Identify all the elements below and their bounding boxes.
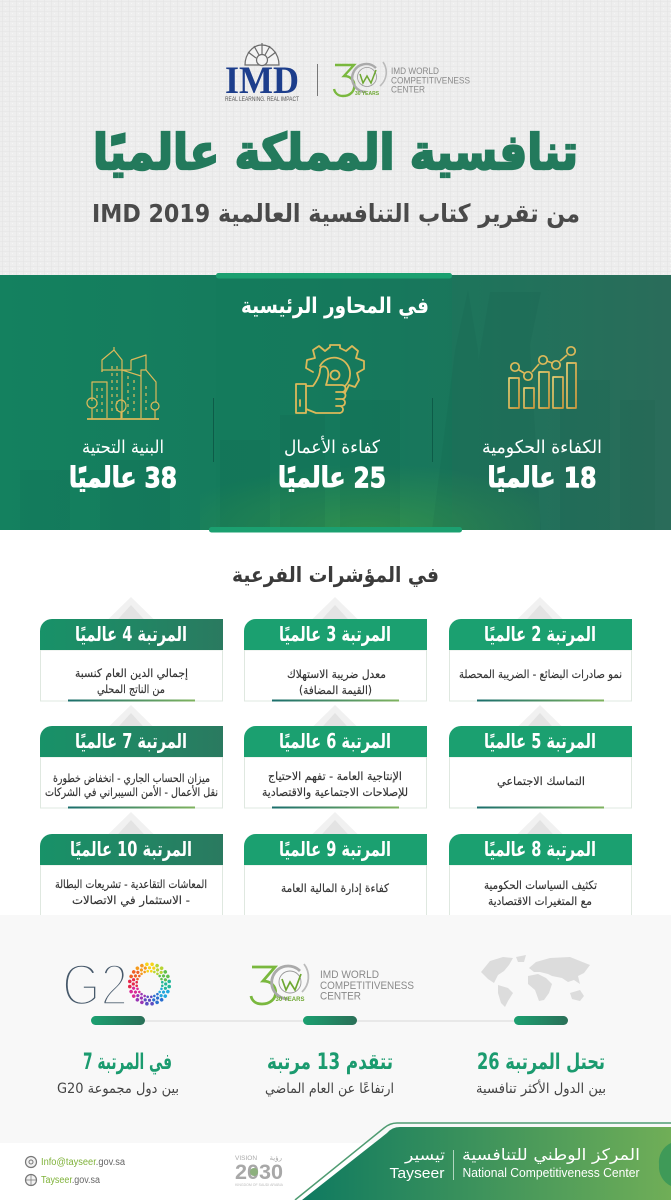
panel: Tayseer banner [295,1123,671,1200]
card: rank 3: معدل ضريبة الاستهلاك [287,667,386,682]
IMD logo: REAL LEARNING. REAL IMPACT [225,97,299,103]
pillar: business efficiency [278,436,386,494]
card: rank 2: نمو صادرات البضائع - الضريبة المحصلة [459,667,622,682]
IMD world competitiveness center logo: IMD WORLD [391,66,439,77]
card: rank 4 [40,619,223,702]
card: rank 8: تكثيف السياسات الحكومية [484,878,597,893]
card: rank 2: المرتبة 2 عالميًا [484,622,596,646]
contact: website: Tayseer.gov.sa [41,1175,100,1186]
Latin brand name: Tayseer [390,1165,444,1182]
logo: IMD world competitiveness center: CENTER [320,990,361,1002]
card: rank 10: المرتبة 10 عالميًا [70,837,192,861]
title: تنافسية المملكة عالميًا [93,124,578,181]
stat: rank 26: بين الدول الأكثر تنافسية [476,1079,606,1097]
marker: climb [303,1016,357,1025]
card: rank 5: المرتبة 5 عالميًا [484,729,596,753]
icon: 30 years emblem: 30 YEARS [355,91,380,97]
card: rank 3: (القيمة المضافة) [299,683,372,697]
top accent bar [216,273,452,278]
card: rank 9 [244,834,427,916]
card: rank 7: ميزان الحساب الجاري - انخفاض خطورة [53,771,210,786]
pillar: business efficiency: 25 عالميًا [278,461,386,494]
logo: vision 2030: 2030 [235,1161,283,1184]
card: rank 5: التماسك الاجتماعي [497,774,585,788]
icon: G20 colour ring [128,962,171,1006]
IMD logo [225,43,299,103]
stat: up 13 places [265,1050,394,1097]
card: rank 4: من الناتج المحلي [97,682,165,697]
logo: IMD world competitiveness center: IMD WORLD [320,969,379,981]
pillar: infrastructure: 38 عالميًا [69,461,177,494]
card: rank 10: المعاشات التقاعدية - تشريعات البطالة [55,877,207,892]
card: rank 8: المرتبة 8 عالميًا [484,837,596,861]
card: rank 8 [449,834,632,916]
pillar: infrastructure [69,437,177,494]
logo: vision 2030: VISION [235,1155,257,1162]
panel: global ranks [0,915,671,1143]
card: rank 10: - الاستثمار في الاتصالات [72,893,190,908]
stat: up 13 places: تتقدم 13 مرتبة [267,1050,393,1075]
logo: IMD world competitiveness center [251,964,414,1004]
card: rank 9: المرتبة 9 عالميًا [279,837,391,861]
stat: G20 rank 7: بين دول مجموعة G20 [57,1081,179,1097]
card: rank 3: المرتبة 3 عالميًا [279,622,391,646]
logo: G20: G2 [62,953,128,1018]
logo: IMD world competitiveness center: 30 YEARS [276,997,304,1003]
card: rank 4: إجمالي الدين العام كنسبة [75,666,188,681]
logo: vision 2030 [235,1154,284,1187]
subtitle: من تقرير كتاب التنافسية العالمية IMD 2019 [92,199,580,229]
heading: main pillars: في المحاور الرئيسية [241,294,429,319]
card: rank 6 [244,726,427,808]
card: rank 8: مع المتغيرات الاقتصادية [488,894,592,909]
pillar: government efficiency: 18 عالميًا [487,461,596,494]
stat: up 13 places: ارتفاعًا عن العام الماضي [265,1081,394,1097]
pillar: business efficiency: كفاءة الأعمال [284,436,380,458]
bottom accent bar [209,527,462,532]
card: rank 7: نقل الأعمال - الأمن السيبراني في الشركات [45,785,218,800]
IMD world competitiveness center logo: COMPETITIVENESS [391,76,470,86]
card: rank 6: للإصلاحات الاجتماعية والاقتصادية [262,785,408,800]
icon: gear and thumb [296,345,364,413]
card: rank 6: المرتبة 6 عالميًا [279,729,391,753]
card: rank 7 [40,726,223,808]
panel: main pillars [0,273,671,532]
icon: world map [481,955,590,1007]
marker: G20 [91,1016,145,1025]
Arabic brand name: تيسير [404,1146,445,1164]
stat: rank 26: تحتل المرتبة 26 [477,1050,605,1075]
card: rank 9: كفاءة إدارة المالية العامة [281,881,389,896]
card: rank 3 [244,619,427,702]
pillar: infrastructure: البنية التحتية [82,437,164,458]
card: rank 2 [449,619,632,702]
icon: city [87,347,159,419]
icon: chart [509,347,576,408]
stat: G20 rank 7: في المرتبة 7 [83,1050,172,1075]
IMD logo: IMD [225,59,299,102]
logo: vision 2030: رؤية [270,1154,282,1162]
contact: email: Info@tayseer.gov.sa [41,1157,125,1168]
pillar: government efficiency [482,437,602,494]
Arabic centre name: المركز الوطني للتنافسية [462,1145,640,1165]
card: rank 5 [449,726,632,808]
icon: IMD sunburst arch [245,43,279,66]
card: rank 7: المرتبة 7 عالميًا [75,729,187,753]
heading: sub indicators: في المؤشرات الفرعية [232,563,439,587]
chevrons behind cards [87,597,584,855]
stat: G20 rank 7 [57,1050,179,1097]
footer [0,1123,671,1200]
skyline [20,290,655,530]
IMD world competitiveness center logo: CENTER [391,84,425,96]
logo: vision 2030: KINGDOM OF SAUDI ARABIA [235,1183,284,1187]
card: rank 6: الإنتاجية العامة - تفهم الاحتياج [268,769,402,783]
stat: rank 26 [476,1050,606,1097]
card: rank 4: المرتبة 4 عالميًا [75,622,187,646]
pillar: government efficiency: الكفاءة الحكومية [482,437,602,458]
English centre name: National Competitiveness Center [462,1165,640,1180]
card: rank 10 [40,834,223,916]
header paper background [0,0,671,276]
logo: IMD world competitiveness center: COMPETITIVENESS [320,980,414,992]
marker: global rank [514,1016,568,1025]
IMD world competitiveness center logo [334,62,470,97]
